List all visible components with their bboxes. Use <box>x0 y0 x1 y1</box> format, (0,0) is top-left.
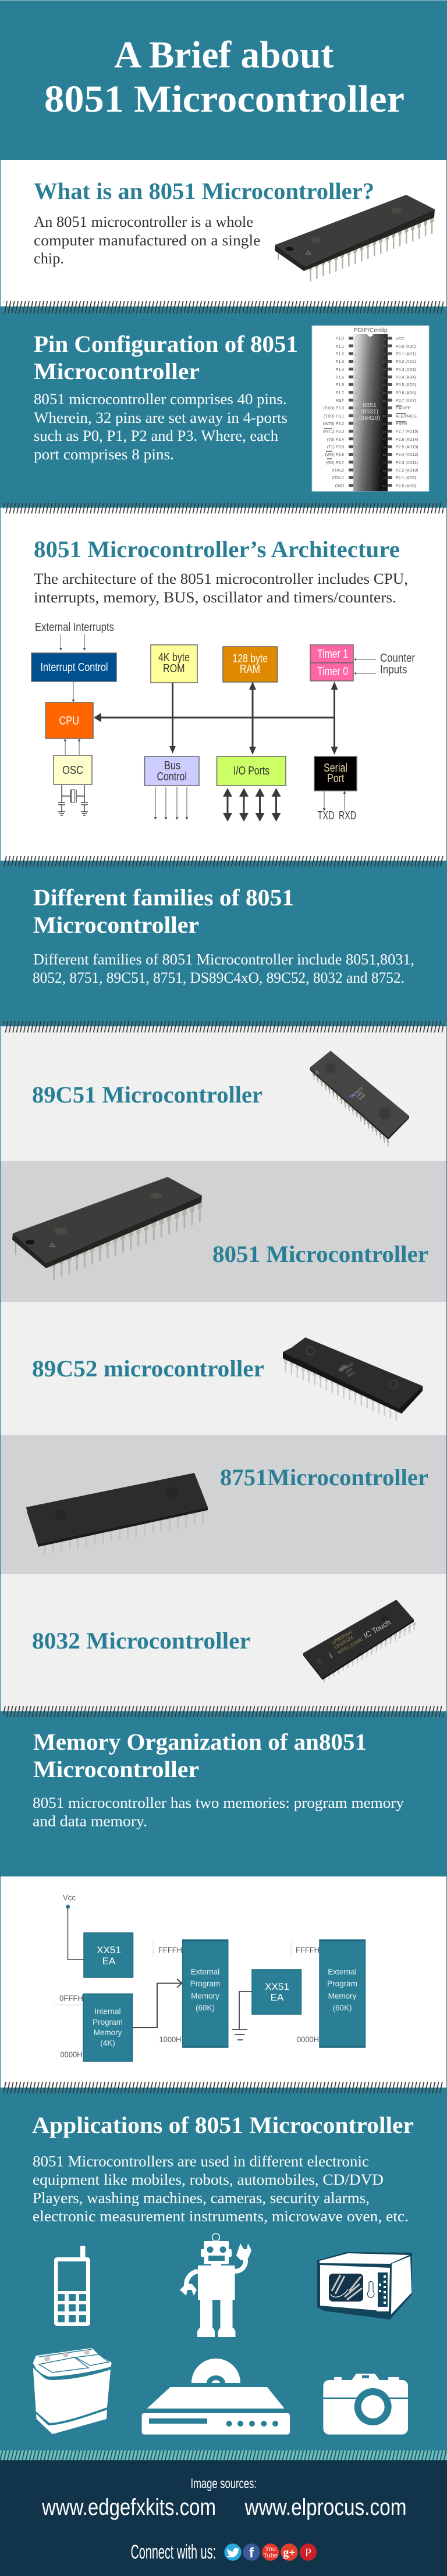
heading: Memory Organization of an8051 <box>33 1729 367 1755</box>
block: serial port: Port <box>327 772 345 785</box>
chart: pin diagram: ALE/PROG <box>396 415 417 419</box>
block: timers <box>310 645 353 681</box>
icon: washing machine <box>33 2348 112 2434</box>
chart: pin diagram: XTAL1 <box>332 476 344 480</box>
serial port TXD RXD: RXD <box>339 809 356 822</box>
icon: 89C52 chip <box>283 1337 423 1418</box>
chart: pin diagram: P0.5 (AD5) <box>396 383 416 387</box>
block: timers: Timer 0 <box>317 665 348 678</box>
block: XX51 EA high: XX51 <box>97 1945 121 1956</box>
chart: pin diagram: 30 <box>383 415 386 418</box>
icon: youtube: You <box>265 2546 276 2553</box>
block: interrupt control <box>31 653 116 682</box>
chart: pin diagram: 14 <box>355 438 359 441</box>
block: ROM: ROM <box>163 662 185 675</box>
labels: external addresses 1: 1000H <box>159 2035 182 2044</box>
block: external program memory 2: External <box>328 1968 357 1976</box>
chart: pin diagram: 5 <box>355 368 357 371</box>
chart: pin diagram: 31 <box>383 407 386 410</box>
panel: 89C52 <box>0 1302 447 1435</box>
chart: pin diagram: (INT0) P3.2 <box>323 422 344 426</box>
block: RAM: 128 byte <box>233 652 268 665</box>
description: Players, washing machines, cameras, security alarms, <box>33 2190 370 2206</box>
description: and data memory. <box>33 1813 147 1829</box>
block: RAM <box>223 647 277 682</box>
description: computer manufactured on a single <box>34 232 261 249</box>
title: A Brief about <box>114 34 334 76</box>
icon: google plus: g+ <box>283 2546 296 2559</box>
chart: pin diagram: 37 <box>383 361 386 363</box>
block: internal program memory: Internal <box>94 2007 121 2015</box>
block: OSC <box>54 755 92 784</box>
chart: pin diagram: P0.7 (AD7) <box>396 399 416 403</box>
block: CPU: CPU <box>59 715 79 727</box>
chart: pin diagram: 32 <box>383 399 386 402</box>
chart: pin diagram: 25 <box>383 454 386 456</box>
heading: Microcontroller <box>34 358 200 384</box>
labels: external addresses 2: 0000H <box>297 2035 319 2044</box>
panel: architecture <box>0 508 447 861</box>
panel: 89C51 <box>0 1026 447 1161</box>
labels: internal addresses <box>54 1993 83 2059</box>
chart: pin diagram: 27 <box>383 438 386 441</box>
serial port TXD RXD: TXD <box>318 809 334 822</box>
source link: elprocus: www.elprocus.com <box>244 2495 406 2520</box>
chart: pin diagram: 23 <box>383 469 386 472</box>
chart: pin diagram: P2.1 (AD9) <box>396 476 416 480</box>
chart: pin diagram: GND <box>335 484 344 488</box>
connect with us label: Connect with us: <box>130 2541 216 2563</box>
icon: twitter <box>224 2543 242 2561</box>
labels: external addresses 1 <box>153 1941 182 2044</box>
chart: pin diagram: P0.1 (AD1) <box>396 352 416 356</box>
chart: pin diagram: 8051 <box>363 402 377 409</box>
block: serial port <box>314 757 357 791</box>
icon: 8051 chip <box>12 1177 205 1274</box>
chart: pin diagram: 12 <box>355 423 359 426</box>
panel: 8032 <box>0 1574 447 1711</box>
chart: pin diagram: (TXD) P3.1 <box>324 415 344 419</box>
label: Vcc: Vcc <box>63 1893 76 1902</box>
icon: 89C51 chip: 24PC <box>356 1091 364 1098</box>
chart: pin diagram: P2.5 (AD13) <box>396 445 418 449</box>
block: internal program memory: Program <box>93 2018 123 2026</box>
panel: pin configuration <box>0 306 447 508</box>
description <box>34 570 408 606</box>
chart: pin diagram: P0.2 (AD2) <box>396 360 416 364</box>
heading <box>33 1729 367 1782</box>
chart: pin diagram: (WR) P3.6 <box>325 453 344 457</box>
panel: memory diagram <box>0 1876 447 2088</box>
chart: pin diagram: 18 <box>355 469 359 472</box>
description <box>33 2153 409 2225</box>
block: bus control: Control <box>157 770 187 783</box>
icon: youtube: Tube <box>263 2552 278 2559</box>
icon: 89C52 chip: 24PI <box>345 1368 353 1375</box>
icon: facebook <box>243 2543 260 2561</box>
heading <box>34 331 298 384</box>
chart: pin diagram: 26 <box>383 446 386 449</box>
chart: pin diagram: P1.3 <box>336 360 344 364</box>
arrow: internal to external <box>133 1979 182 2028</box>
chart: pin diagram: (89420) <box>359 415 380 422</box>
arrows: system bus <box>94 682 338 755</box>
chart: pin diagram: P1.5 <box>336 376 344 380</box>
chart: pin diagram: (INT1) P3.3 <box>323 430 344 434</box>
panel: what is an 8051 <box>0 160 447 306</box>
panel: memory organization <box>0 1711 447 1876</box>
chart: pin diagram: P1.6 <box>336 383 344 387</box>
block: OSC: OSC <box>62 764 83 777</box>
icon: facebook: f <box>249 2545 254 2561</box>
description: The architecture of the 8051 microcontroller includes CPU, <box>34 570 408 587</box>
block: external program memory 2: Program <box>327 1979 357 1988</box>
chart: pin diagram: EA/VPP <box>396 406 411 411</box>
block: external program memory 2: Memory <box>328 1992 357 2000</box>
icon: chip photo <box>275 195 437 276</box>
block: external program memory 1: Memory <box>191 1992 219 2000</box>
heading: Different families of 8051 <box>33 884 294 911</box>
description: equipment like mobiles, robots, automobiles, CD/DVD <box>33 2171 384 2188</box>
heading: 8032 Microcontroller <box>32 1628 250 1654</box>
description: 8051 Microcontrollers are used in different electronic <box>33 2153 369 2170</box>
heading: 8051 Microcontroller <box>212 1241 428 1267</box>
chart: pin diagram: 17 <box>355 461 359 464</box>
chart: pin diagram: P2.3 (AD11) <box>396 461 418 465</box>
icon: camera <box>323 2374 408 2435</box>
label: counter inputs: Counter <box>380 652 415 665</box>
chart: pin diagram: XTAL2 <box>332 469 344 473</box>
description: An 8051 microcontroller is a whole <box>34 213 253 230</box>
chart: pin diagram: P1.7 <box>336 391 344 395</box>
icon: 8032 chip: LP8032AH <box>331 1629 353 1645</box>
block: internal program memory <box>83 1994 133 2061</box>
icon: DVD player <box>142 2359 290 2435</box>
chart: pin diagram: 2 <box>355 345 357 348</box>
block: external program memory 1: Program <box>190 1979 220 1988</box>
chart: pin diagram: P2.6 (AD14) <box>396 438 418 442</box>
icon: robot <box>180 2234 251 2337</box>
block: timers: Timer 1 <box>317 648 348 661</box>
block: XX51 EA low <box>252 1970 301 2014</box>
icon: pinterest <box>300 2543 317 2561</box>
description: port comprises 8 pins. <box>34 446 174 463</box>
chart: pin diagram: 19 <box>355 477 359 480</box>
chart: pin diagram: VCC <box>396 337 405 341</box>
chart: pin diagram: 13 <box>355 430 359 433</box>
block: bus control: Bus <box>164 759 180 772</box>
chart: pin diagram: (RXD) P3.0 <box>323 406 344 411</box>
block: bus control <box>144 757 199 786</box>
icon: 89C51 chip: 0440 <box>359 1094 366 1101</box>
chart: pin diagram: PSEN <box>396 422 407 426</box>
chart: pin diagram: 15 <box>355 446 359 449</box>
block: serial port: Serial <box>324 762 347 775</box>
heading: 89C52 microcontroller <box>32 1355 264 1382</box>
icon: youtube <box>262 2543 279 2561</box>
block: XX51 EA low: EA <box>271 1992 284 2003</box>
labels: external addresses 2 <box>291 1941 320 2044</box>
chart: pin diagram: 38 <box>383 353 386 356</box>
chart: pin diagram: 29 <box>383 423 386 426</box>
icon: ground <box>232 1992 252 2040</box>
chart: pin diagram: P0.6 (AD6) <box>396 391 416 395</box>
chart: pin diagram: (RD) P3.7 <box>326 461 344 465</box>
description: electronic measurement instruments, microwave oven, etc. <box>33 2208 409 2225</box>
chart: pin diagram: P0.0 (AD0) <box>396 345 416 349</box>
block: internal program memory: Memory <box>94 2028 122 2037</box>
chart: pin diagram: RST <box>336 399 345 403</box>
icon: 89C52 chip: 0644 <box>347 1371 356 1378</box>
image sources label: Image sources: <box>191 2476 257 2492</box>
chart: pin diagram: 4 <box>355 361 357 363</box>
labels: internal addresses: 0FFFH <box>59 1993 83 2003</box>
chart: pin diagram: 20 <box>355 484 359 487</box>
chart: pin diagram: P0.4 (AD4) <box>396 376 416 380</box>
description: such as P0, P1, P2 and P3. Where, each <box>34 427 278 444</box>
description: Wherein, 32 pins are set away in 4-ports <box>34 409 288 426</box>
block: ROM: 4K byte <box>158 651 190 664</box>
heading: Applications of 8051 Microcontroller <box>32 2112 414 2138</box>
chart: pin diagram: (T1) P3.5 <box>327 445 344 449</box>
block: external program memory 1: External <box>191 1968 219 1976</box>
block: external program memory 2 <box>320 1940 366 2047</box>
icon: crystal and capacitors <box>58 785 88 815</box>
label: counter inputs <box>354 652 415 676</box>
chart: pin diagram: 24 <box>383 461 386 464</box>
label: counter inputs: Inputs <box>380 663 407 676</box>
icon: mobile phone <box>54 2246 90 2326</box>
icon: 8032 chip <box>303 1600 418 1681</box>
chart: pin diagram: 6 <box>355 376 357 379</box>
labels: external addresses 2: FFFFH <box>296 1945 320 1954</box>
panel: 8051 <box>0 1161 447 1302</box>
heading: What is an 8051 Microcontroller? <box>34 178 374 204</box>
chart: pin diagram: (T0) P3.4 <box>327 438 344 442</box>
description: Different families of 8051 Microcontroller include 8051,8031, <box>33 951 414 968</box>
icon: 8032 chip: L8326524 <box>334 1635 354 1650</box>
block: I/O ports <box>217 757 286 786</box>
description: interrupts, memory, BUS, oscillator and timers/counters. <box>34 589 396 606</box>
chart: pin diagram: 28 <box>383 430 386 433</box>
panel: different families <box>0 861 447 1026</box>
chart: pin diagram: 21 <box>383 484 386 487</box>
serial port TXD RXD <box>318 791 356 822</box>
arrows: bus control outputs <box>154 787 189 820</box>
heading: Pin Configuration of 8051 <box>34 331 298 357</box>
description: 8051 microcontroller comprises 40 pins. <box>34 391 287 408</box>
block: XX51 EA high <box>84 1933 133 1977</box>
chart: pin diagram: P2.7 (AD15) <box>396 430 418 434</box>
heading <box>33 884 294 938</box>
label: external interrupts: External Interrupts <box>35 621 114 634</box>
labels: external addresses 1: FFFFH <box>158 1945 182 1954</box>
block: ROM <box>151 645 197 683</box>
chart: pin diagram: P2.0 (AD8) <box>396 484 416 488</box>
chart: pin diagram: 3 <box>355 353 357 356</box>
icon: microwave oven <box>317 2252 412 2320</box>
description <box>33 951 414 986</box>
chart: pin diagram: P0.3 (AD3) <box>396 368 416 372</box>
heading: 89C51 Microcontroller <box>32 1082 262 1108</box>
panel: applications <box>0 2088 447 2450</box>
chart: pin diagram: (8031) <box>361 408 378 415</box>
chart: pin diagram: 11 <box>355 415 358 418</box>
icon: 89C52 chip: AT89C52 <box>340 1362 354 1373</box>
block: CPU <box>45 702 93 738</box>
block: internal program memory: (4K) <box>100 2039 115 2047</box>
icon: 89C51 chip: AT89C51 <box>352 1087 364 1098</box>
description: 8052, 8751, 89C51, 8751, DS89C4xO, 89C52, 8032 and 8752. <box>33 969 405 986</box>
chart: pin diagram: P1.1 <box>336 345 344 349</box>
chart: pin diagram: 10 <box>355 407 359 410</box>
block: external program memory 1 <box>183 1940 228 2047</box>
chart: pin diagram: 35 <box>383 376 386 379</box>
chart: pin diagram: 34 <box>383 384 386 387</box>
panel: 8751 <box>0 1435 447 1574</box>
chart: pin diagram: 16 <box>355 454 359 456</box>
chart: pin diagram: P2.2 (AD10) <box>396 469 418 473</box>
chart: pin diagram: P2.4 (AD12) <box>396 453 418 457</box>
chart: pin diagram: 33 <box>383 391 386 394</box>
block: XX51 EA low: XX51 <box>265 1981 289 1992</box>
description: 8051 microcontroller has two memories: program memory <box>33 1794 404 1811</box>
block: external program memory 1: (60K) <box>196 2004 215 2012</box>
block: interrupt control: Interrupt Control <box>41 661 108 674</box>
label: Vcc <box>63 1893 84 1960</box>
chart: pin diagram: 39 <box>383 345 386 348</box>
source link: edgefxkits: www.edgefxkits.com <box>41 2495 216 2520</box>
chart: pin diagram: 1 <box>355 337 357 340</box>
icon: 8751 chip <box>26 1473 209 1550</box>
chart: architecture block diagram <box>31 621 415 822</box>
heading: 8751Microcontroller <box>220 1464 428 1490</box>
chart: pin diagram: 7 <box>355 384 357 387</box>
icon: pinterest: P <box>305 2546 311 2559</box>
chart: pin diagram: 22 <box>383 477 386 480</box>
icon: 8032 chip: IC Touch <box>362 1618 392 1640</box>
icon: 89C51 chip <box>310 1051 409 1147</box>
arrows: I/O ports <box>223 788 281 822</box>
block: external program memory 2: (60K) <box>332 2004 352 2012</box>
block: XX51 EA high: EA <box>102 1956 116 1967</box>
chart: pin diagram: 40 <box>383 337 386 340</box>
description <box>33 1794 404 1829</box>
description <box>34 213 261 267</box>
heading: Microcontroller <box>33 912 199 938</box>
heading: 8051 Microcontroller’s Architecture <box>34 536 400 562</box>
chart: pin diagram: 9 <box>355 399 357 402</box>
chart: pin diagram: P1.2 <box>336 352 344 356</box>
description: chip. <box>34 250 64 267</box>
chart: pin diagram: PDIP/Cerdip <box>353 327 388 334</box>
footer panel <box>0 2450 447 2576</box>
icon: 8032 chip: INTEL ©1990 <box>337 1636 364 1656</box>
description <box>34 391 288 463</box>
chart: pin diagram: 8 <box>355 391 357 394</box>
title <box>44 34 405 120</box>
chart: pin diagram: P1.4 <box>336 368 344 372</box>
chart: pin diagram: 36 <box>383 368 386 371</box>
icon: 8032 chip: i <box>328 1651 334 1660</box>
heading: Microcontroller <box>33 1756 199 1782</box>
labels: internal addresses: 0000H <box>61 2050 83 2059</box>
chart: pin diagram: P1.0 <box>336 337 344 341</box>
block: RAM: RAM <box>240 663 260 676</box>
chart: pin diagram <box>312 326 429 491</box>
header panel <box>0 0 447 160</box>
block: I/O ports: I/O Ports <box>233 765 269 777</box>
title: 8051 Microcontroller <box>44 78 405 120</box>
icon: google plus <box>281 2543 298 2561</box>
